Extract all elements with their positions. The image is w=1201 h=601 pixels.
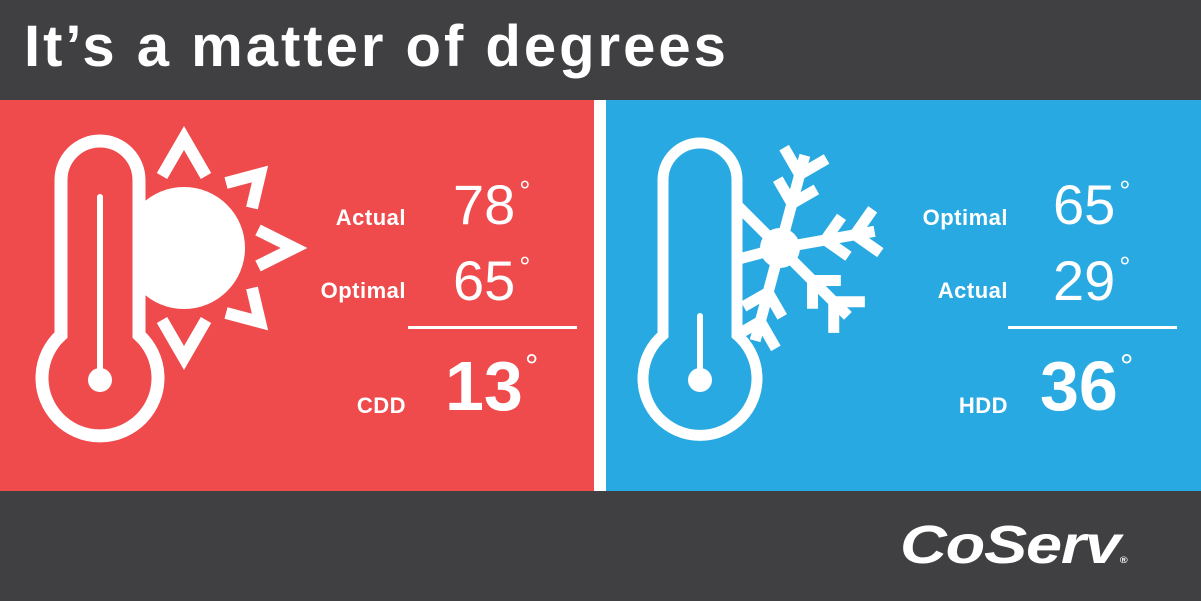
number: 13: 13° — [445, 347, 538, 425]
number: 29: 29° — [1053, 249, 1130, 312]
logo: CoServ: CoServ® — [900, 515, 1128, 575]
title: It’s a matter of degrees — [24, 14, 729, 79]
label: HDD: HDD — [959, 393, 1008, 418]
panel: white separator — [594, 100, 606, 491]
divider line — [408, 326, 577, 329]
divider line — [1008, 326, 1177, 329]
number: 78: 78° — [453, 173, 530, 236]
label: Actual: Actual — [938, 278, 1008, 303]
text block: blue values — [923, 173, 1177, 425]
panel: heating (blue) — [606, 100, 1201, 491]
label: Optimal: Optimal — [923, 205, 1008, 230]
number: 36: 36° — [1040, 347, 1133, 425]
panel: cooling (red) — [0, 100, 594, 491]
icon: thermometer with snowflake — [638, 138, 884, 441]
icon: thermometer with sun — [36, 126, 308, 442]
label: Actual: Actual — [336, 205, 406, 230]
number: 65: 65° — [1053, 173, 1130, 236]
text block: red values — [321, 173, 577, 425]
label: Optimal: Optimal — [321, 278, 406, 303]
label: CDD: CDD — [357, 393, 406, 418]
number: 65: 65° — [453, 249, 530, 312]
